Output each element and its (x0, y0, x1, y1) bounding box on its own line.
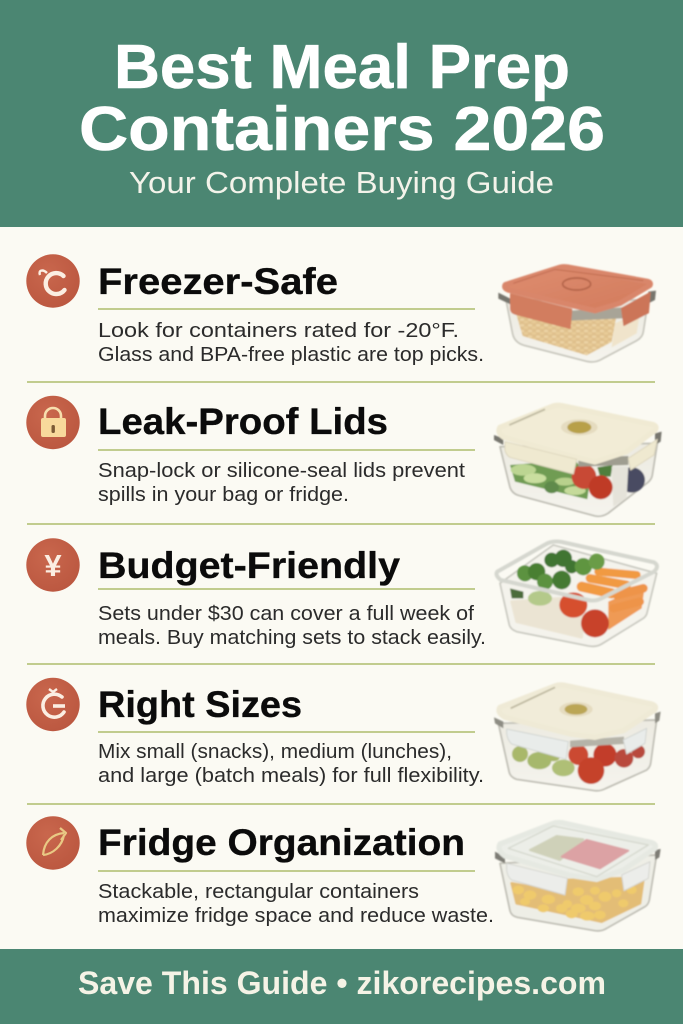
icon: yen: ¥ (44, 548, 62, 583)
description: Stackable, rectangular containers (98, 880, 419, 903)
title: Best Meal Prep (114, 33, 570, 102)
title (79, 33, 605, 164)
description: Glass and BPA-free plastic are top picks. (98, 343, 484, 366)
icon: padlock (26, 396, 80, 449)
heading: Right Sizes (98, 683, 302, 725)
description (98, 602, 486, 649)
heading: Fridge Organization (98, 821, 465, 863)
description: maximize fridge space and reduce waste. (98, 904, 494, 927)
panel: right sizes (26, 678, 661, 791)
heading: Leak-Proof Lids (98, 400, 388, 442)
description (98, 459, 465, 506)
panel: budget-friendly (26, 538, 657, 649)
description: meals. Buy matching sets to stack easily. (98, 626, 486, 649)
description: Snap-lock or silicone-seal lids prevent (98, 459, 465, 482)
description: Sets under $30 can cover a full week of (98, 602, 474, 625)
container: terracotta lid with lentils (498, 267, 656, 362)
footer banner (0, 949, 683, 1024)
description: Look for containers rated for -20°F. (98, 319, 459, 342)
description (98, 880, 494, 927)
description: and large (batch meals) for full flexibility. (98, 764, 484, 787)
title: Containers 2026 (79, 95, 605, 164)
icon: stopwatch (26, 678, 80, 731)
subtitle: Your Complete Buying Guide (129, 166, 554, 200)
footer text: Save This Guide • zikorecipes.com (78, 965, 606, 1001)
description: Mix small (snacks), medium (lunches), (98, 740, 452, 763)
description (98, 319, 484, 366)
icon: curved arrow (26, 816, 80, 870)
icon: yen (26, 538, 80, 592)
container: clear lid with chickpeas (495, 822, 661, 931)
description (98, 740, 484, 787)
panel: leak-proof lids (26, 396, 662, 516)
heading: Budget-Friendly (98, 544, 400, 586)
container: open glass with broccoli, carrots and tomatoes (497, 542, 657, 646)
container: cream lid with salad and tomatoes (494, 405, 662, 516)
icon: freezer (26, 254, 80, 308)
heading: Freezer-Safe (98, 260, 338, 302)
panel: freezer-safe (26, 254, 656, 366)
description: spills in your bag or fridge. (98, 483, 349, 506)
container: cream lid with grapes and tomatoes (494, 685, 661, 791)
header banner (0, 0, 683, 227)
panel: fridge organization (26, 816, 661, 931)
